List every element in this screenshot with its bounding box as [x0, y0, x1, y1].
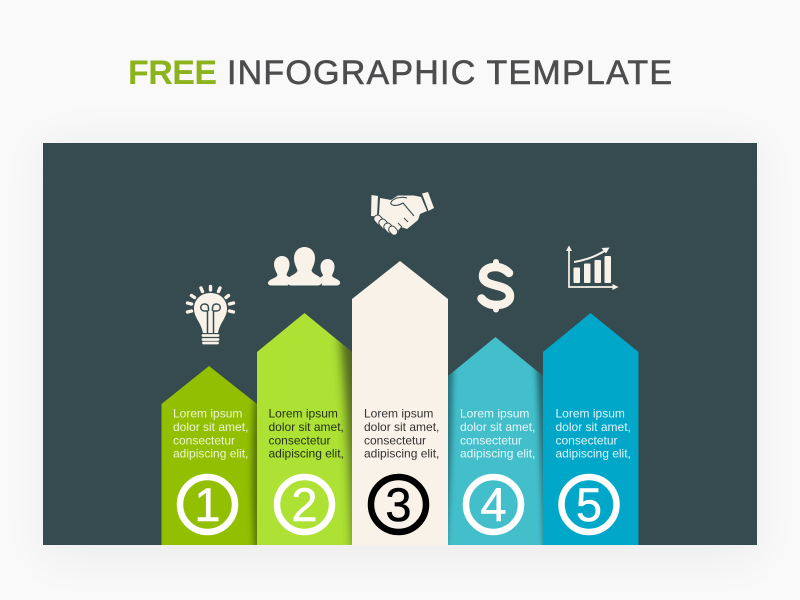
- title: FREE: [128, 54, 217, 92]
- text block 2: consectetur: [268, 434, 331, 448]
- text block 4: adipiscing elit,: [460, 446, 535, 460]
- number badge 5: [562, 477, 616, 532]
- text block 1: adipiscing elit,: [173, 446, 248, 460]
- text block 2: Lorem ipsum: [268, 406, 338, 420]
- number badge 3: [371, 477, 426, 532]
- icon: handshake: [371, 192, 434, 237]
- arrow 1: green column: [162, 366, 264, 550]
- arrow 4: teal column: [448, 337, 543, 545]
- text block 1: consectetur: [173, 434, 235, 448]
- text block 5: consectetur: [556, 434, 618, 448]
- number badge 4: [466, 477, 521, 532]
- title: INFOGRAPHIC TEMPLATE: [227, 54, 672, 92]
- number badge 3: 3: [385, 478, 412, 531]
- icon: light bulb: [188, 286, 234, 343]
- text block 3: adipiscing elit,: [364, 446, 439, 460]
- text block 3: consectetur: [364, 434, 426, 448]
- icon: group of people: [268, 247, 340, 286]
- text block 5: Lorem ipsum: [556, 406, 625, 420]
- text block 1: dolor sit amet,: [173, 420, 248, 434]
- text block 4: Lorem ipsum: [460, 406, 529, 420]
- number badge 4: 4: [480, 478, 507, 531]
- text block 4: consectetur: [460, 434, 522, 448]
- text block 1: Lorem ipsum: [173, 406, 242, 420]
- number badge 1: 1: [194, 478, 221, 531]
- number badge 1: [180, 477, 235, 532]
- panel: dark background: [43, 143, 757, 545]
- arrow 3: cream column: [352, 261, 448, 545]
- text block 5: dolor sit amet,: [556, 420, 631, 434]
- arrow 2: lime column: [257, 313, 360, 550]
- text block 3: dolor sit amet,: [364, 420, 439, 434]
- number badge 5: 5: [576, 478, 602, 531]
- number badge 2: 2: [291, 478, 318, 531]
- text block 2: adipiscing elit,: [268, 446, 344, 460]
- icon: growth chart: [566, 246, 618, 290]
- text block 5: adipiscing elit,: [556, 446, 631, 460]
- text block 2: dolor sit amet,: [268, 420, 344, 434]
- text block 3: Lorem ipsum: [364, 406, 433, 420]
- icon: dollar sign: [482, 262, 510, 310]
- arrow 5: blue column: [543, 313, 638, 545]
- text block 4: dolor sit amet,: [460, 420, 535, 434]
- number badge 2: [277, 477, 332, 532]
